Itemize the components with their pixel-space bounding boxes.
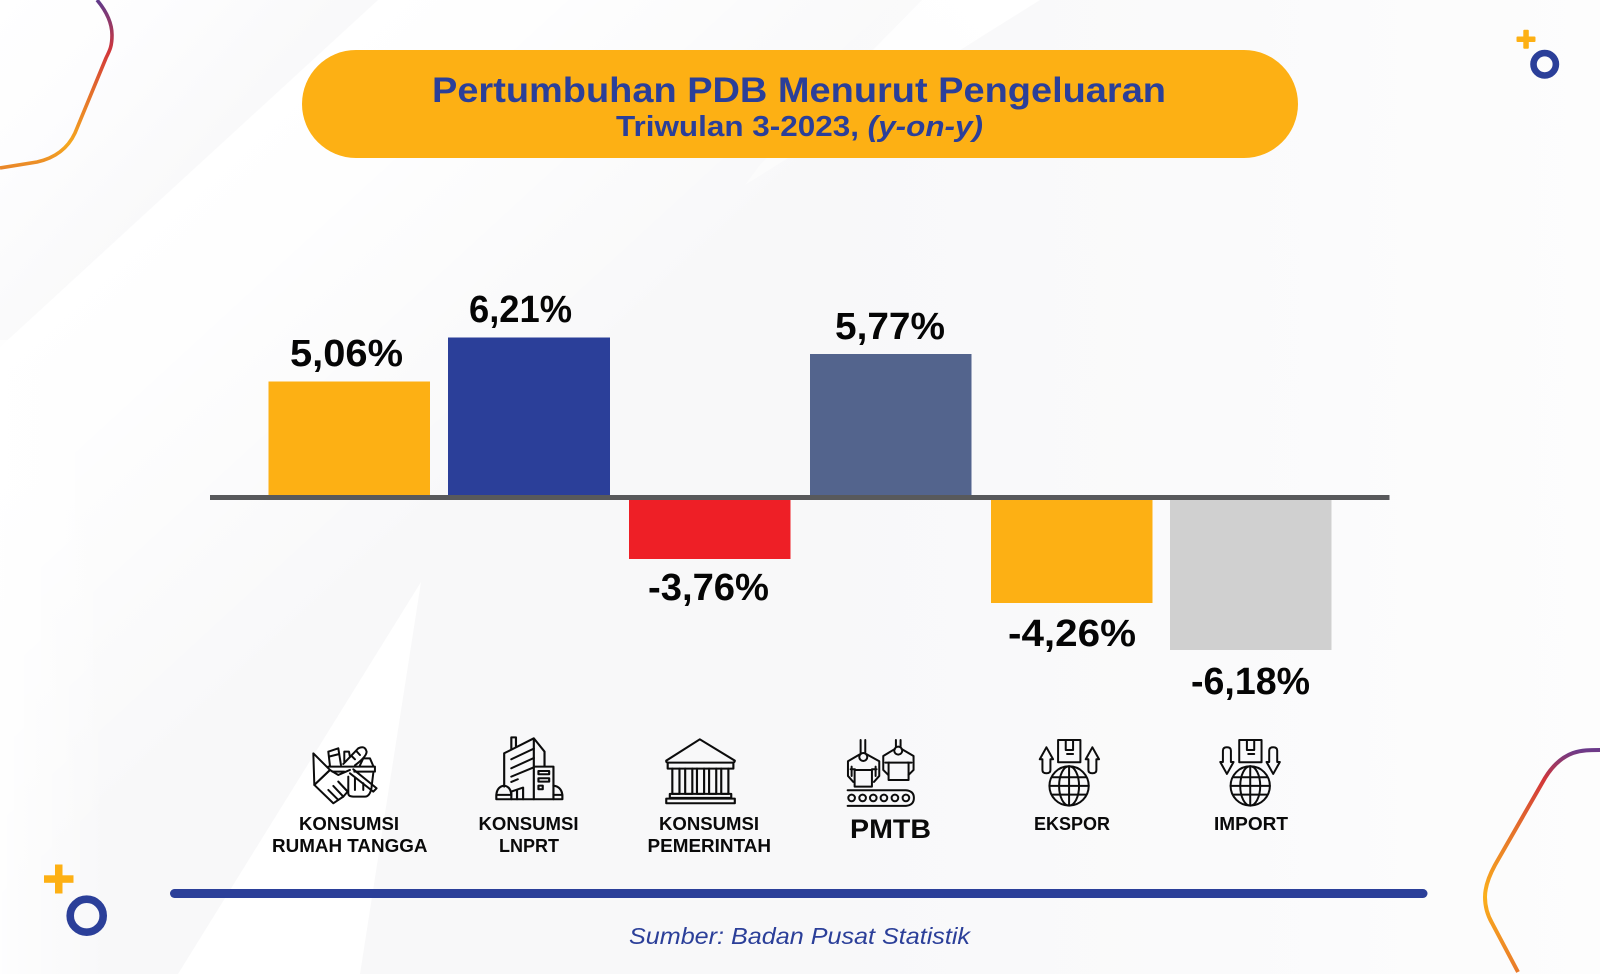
label: konsumsi rumah tangga bbox=[272, 814, 428, 856]
value: 5,06%: 5,06% bbox=[290, 333, 403, 375]
bar chart bbox=[210, 289, 1390, 703]
subtitle: Triwulan 3-2023, (y-on-y) bbox=[616, 111, 983, 143]
bar: konsumsi LNPRT bbox=[448, 338, 610, 496]
decoration: bottom left plus and ring bbox=[44, 864, 103, 932]
label: import: IMPORT bbox=[1214, 814, 1288, 834]
decorative curve: bottom right bbox=[1485, 750, 1600, 972]
label: konsumsi LNPRT: KONSUMSI bbox=[478, 814, 578, 834]
bar: konsumsi pemerintah bbox=[629, 499, 790, 559]
axis bbox=[210, 495, 1390, 500]
source note: Sumber: Badan Pusat Statistik bbox=[629, 923, 972, 949]
label: konsumsi rumah tangga: KONSUMSI bbox=[299, 814, 399, 834]
label: konsumsi pemerintah: KONSUMSI bbox=[659, 814, 759, 834]
value: -3,76%: -3,76% bbox=[648, 567, 769, 609]
decorative curve: top left bbox=[0, 0, 112, 168]
label: konsumsi rumah tangga: RUMAH TANGGA bbox=[272, 836, 428, 856]
title: Pertumbuhan PDB Menurut Pengeluaran bbox=[432, 71, 1166, 110]
label: PMTB: PMTB bbox=[850, 814, 931, 844]
label: ekspor: EKSPOR bbox=[1034, 814, 1110, 834]
bar: import bbox=[1170, 499, 1332, 650]
label: konsumsi LNPRT bbox=[478, 814, 578, 856]
bar: konsumsi rumah tangga bbox=[268, 382, 430, 496]
value: -6,18%: -6,18% bbox=[1191, 661, 1310, 703]
icon: PMTB conveyor robots bbox=[848, 740, 914, 806]
icon: government building bbox=[666, 739, 735, 803]
label: konsumsi pemerintah: PEMERINTAH bbox=[648, 836, 771, 856]
value: 6,21%: 6,21% bbox=[469, 289, 572, 331]
title banner bbox=[302, 50, 1298, 158]
icon: import globe bbox=[1220, 740, 1280, 806]
bar: PMTB bbox=[810, 354, 972, 496]
label: konsumsi LNPRT: LNPRT bbox=[499, 836, 559, 856]
value: 5,77%: 5,77% bbox=[835, 306, 945, 348]
icon: shopping basket with hand bbox=[313, 747, 377, 803]
footer rule bbox=[170, 889, 1428, 898]
icon: office building bbox=[496, 737, 562, 799]
label: konsumsi pemerintah bbox=[648, 814, 771, 856]
bar: ekspor bbox=[991, 499, 1152, 603]
value: -4,26%: -4,26% bbox=[1008, 613, 1136, 655]
decoration: top right plus and ring bbox=[1516, 30, 1556, 76]
icon: export globe bbox=[1040, 740, 1099, 806]
